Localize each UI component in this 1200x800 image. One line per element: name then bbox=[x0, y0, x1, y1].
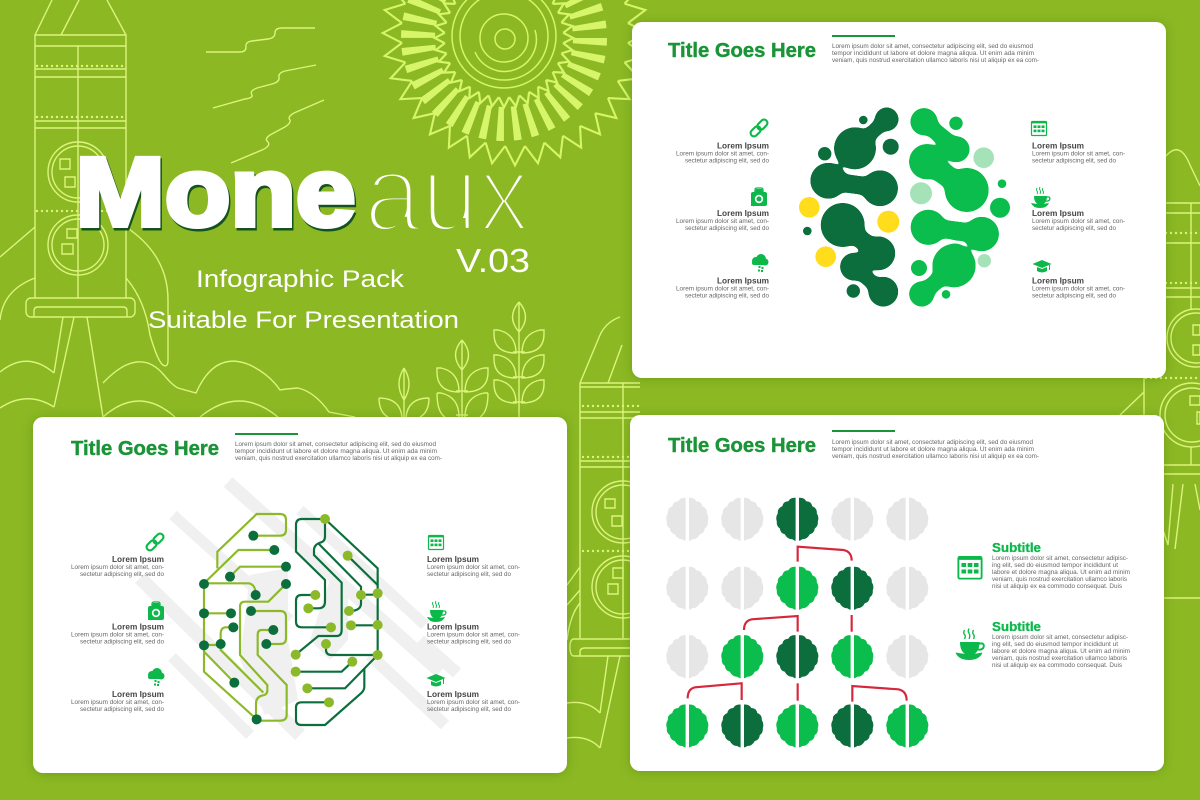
label left 1: sectetur adipiscing elit, sed do bbox=[685, 158, 770, 164]
label left 2: sectetur adipiscing elit, sed do bbox=[80, 638, 165, 646]
label left 1: Lorem ipsum dolor sit amet, con- bbox=[676, 150, 769, 158]
sun illustration bbox=[330, 0, 657, 222]
chart: circuit brain bbox=[199, 514, 383, 725]
label left 2 bbox=[676, 208, 770, 232]
subtitle lines bbox=[148, 266, 459, 334]
diagonal background bands bbox=[140, 482, 457, 735]
label right 2: sectetur adipiscing elit, sed do bbox=[427, 638, 512, 646]
subtitle block 1: nisi ut aliquip ex ea commodo consequat. Duis bbox=[992, 583, 1122, 590]
panel: metaball brain bbox=[632, 22, 1166, 378]
heading rule and description: Lorem ipsum dolor sit amet, consectetur adipiscing elit, sed do eiusmod bbox=[235, 441, 436, 448]
rocket illustration right bbox=[1120, 150, 1200, 598]
label left 2: Lorem Ipsum bbox=[717, 208, 769, 218]
label right 1: sectetur adipiscing elit, sed do bbox=[427, 571, 512, 578]
plants illustration bbox=[379, 302, 544, 417]
label right 1: Lorem ipsum dolor sit amet, con- bbox=[1032, 150, 1125, 158]
heading rule and description bbox=[235, 434, 442, 462]
label right 3 bbox=[1032, 276, 1125, 300]
label left 3: Lorem Ipsum bbox=[112, 689, 164, 699]
label right 2 bbox=[1032, 208, 1125, 232]
subtitle lines: Suitable For Presentation bbox=[148, 307, 459, 334]
label left 3: Lorem ipsum dolor sit amet, con- bbox=[71, 699, 164, 706]
label left 3: Lorem ipsum dolor sit amet, con- bbox=[676, 286, 769, 292]
label right 3 bbox=[427, 689, 520, 713]
icon: graduation cap bbox=[426, 674, 446, 686]
icon: calendar bbox=[1032, 121, 1046, 136]
label right 1: sectetur adipiscing elit, sed do bbox=[1032, 158, 1117, 164]
subtitle block 1: ing elit, sed do eiusmod tempor incididunt ut bbox=[992, 562, 1118, 569]
heading rule and description bbox=[832, 36, 1039, 64]
label right 2: Lorem Ipsum bbox=[427, 622, 479, 632]
heading rule and description: veniam, quis nostrud exercitation ullamco laboris nisi ut aliquip ex ea com- bbox=[832, 57, 1039, 64]
label left 1: Lorem Ipsum bbox=[112, 554, 164, 564]
heading rule and description: tempor incididunt ut labore et dolore magna aliqua. Ut enim ada minim bbox=[832, 50, 1034, 57]
subtitle block 2: ing elit, sed do eiusmod tempor incididunt ut bbox=[992, 641, 1118, 648]
rocket illustration left bbox=[0, 0, 355, 417]
chart: metaball brain bbox=[799, 107, 1010, 307]
icon: link bbox=[145, 532, 165, 552]
label left 2: Lorem ipsum dolor sit amet, con- bbox=[71, 632, 164, 638]
heading rule and description: veniam, quis nostrud exercitation ullamco laboris nisi ut aliquip ex ea com- bbox=[235, 455, 442, 462]
icon: camera bbox=[751, 188, 767, 206]
icon: coffee cup large bbox=[956, 628, 984, 660]
heading rule and description: Lorem ipsum dolor sit amet, consectetur adipiscing elit, sed do eiusmod bbox=[832, 43, 1033, 50]
label left 3: sectetur adipiscing elit, sed do bbox=[685, 292, 770, 300]
subtitle block 2: Subtitle bbox=[992, 619, 1041, 634]
subtitle block 2: labore et dolore magna aliqua. Ut enim ad minim bbox=[992, 648, 1130, 655]
label right 2: sectetur adipiscing elit, sed do bbox=[1032, 225, 1117, 232]
main title: Moneaux: aux bbox=[364, 132, 530, 255]
heading rule and description: tempor incididunt ut labore et dolore magna aliqua. Ut enim ada minim bbox=[832, 446, 1034, 453]
panel: circuit brain bbox=[33, 417, 567, 773]
version label: V.03 bbox=[456, 242, 530, 279]
label right 3: Lorem Ipsum bbox=[427, 689, 479, 699]
label right 1: Lorem Ipsum bbox=[427, 554, 479, 564]
heading: Title Goes Here bbox=[71, 438, 219, 460]
subtitle block 1 bbox=[992, 540, 1130, 590]
label left 3: sectetur adipiscing elit, sed do bbox=[80, 706, 165, 713]
label right 1: Lorem ipsum dolor sit amet, con- bbox=[427, 564, 520, 571]
label right 2: Lorem ipsum dolor sit amet, con- bbox=[1032, 218, 1125, 225]
icon: cloud bbox=[148, 668, 164, 686]
heading: Title Goes Here bbox=[668, 435, 816, 457]
subtitle block 2: Lorem ipsum dolor sit amet, consectetur adipisc- bbox=[992, 634, 1128, 641]
icon: coffee cup bbox=[1031, 187, 1050, 208]
icon: camera bbox=[148, 602, 164, 620]
label right 2: Lorem ipsum dolor sit amet, con- bbox=[427, 632, 520, 638]
panel: brain tree bbox=[630, 415, 1164, 771]
label left 1 bbox=[71, 554, 165, 578]
subtitle block 1: labore et dolore magna aliqua. Ut enim ad minim bbox=[992, 569, 1130, 576]
label right 3: sectetur adipiscing elit, sed do bbox=[1032, 292, 1117, 300]
label left 3 bbox=[676, 276, 770, 300]
heading rule and description: tempor incididunt ut labore et dolore magna aliqua. Ut enim ada minim bbox=[235, 448, 437, 455]
icon: calendar bbox=[428, 535, 444, 550]
rocket illustration centre bbox=[567, 317, 654, 748]
label left 2 bbox=[71, 622, 165, 646]
icon: cloud bbox=[752, 254, 768, 272]
heading rule and description bbox=[832, 431, 1039, 460]
label right 1: Lorem Ipsum bbox=[1032, 140, 1084, 150]
label left 1: sectetur adipiscing elit, sed do bbox=[80, 571, 165, 578]
subtitle block 1: Lorem ipsum dolor sit amet, consectetur adipisc- bbox=[992, 555, 1128, 562]
heading rule and description: Lorem ipsum dolor sit amet, consectetur adipiscing elit, sed do eiusmod bbox=[832, 439, 1033, 446]
label left 1: Lorem Ipsum bbox=[717, 140, 769, 150]
icon: graduation cap bbox=[1032, 260, 1052, 272]
label left 3 bbox=[71, 689, 165, 713]
icon: calendar large bbox=[958, 556, 982, 579]
label left 2: Lorem Ipsum bbox=[112, 622, 164, 632]
main title: Moneaux: Mone bbox=[76, 138, 356, 246]
main title: Moneaux: Mone bbox=[77, 140, 357, 249]
lightning squiggles bbox=[206, 28, 324, 163]
icon: coffee cup bbox=[427, 601, 446, 622]
subtitle lines: Infographic Pack bbox=[196, 266, 405, 293]
label left 3: Lorem Ipsum bbox=[717, 276, 769, 286]
label right 1 bbox=[1032, 140, 1125, 164]
subtitle block 1: Subtitle bbox=[992, 540, 1041, 555]
chart: brain grid bbox=[666, 498, 928, 748]
subtitle block 2: veniam, quis nostrud exercitation ullamco laboris bbox=[992, 655, 1127, 662]
label right 3: Lorem ipsum dolor sit amet, con- bbox=[427, 699, 520, 706]
label left 2: sectetur adipiscing elit, sed do bbox=[685, 225, 770, 232]
label left 2: Lorem ipsum dolor sit amet, con- bbox=[676, 218, 769, 225]
main title: Moneaux bbox=[76, 132, 530, 255]
label right 3: sectetur adipiscing elit, sed do bbox=[427, 706, 512, 713]
label right 3: Lorem Ipsum bbox=[1032, 276, 1084, 286]
label right 1 bbox=[427, 554, 520, 578]
heading rule and description: veniam, quis nostrud exercitation ullamco laboris nisi ut aliquip ex ea com- bbox=[832, 453, 1039, 460]
heading: Title Goes Here bbox=[668, 40, 816, 62]
label right 3: Lorem ipsum dolor sit amet, con- bbox=[1032, 286, 1125, 292]
label left 1 bbox=[676, 140, 770, 164]
label right 2: Lorem Ipsum bbox=[1032, 208, 1084, 218]
subtitle block 2: nisi ut aliquip ex ea commodo consequat. Duis bbox=[992, 662, 1122, 669]
icon: link bbox=[749, 118, 769, 138]
label right 2 bbox=[427, 622, 520, 646]
subtitle block 1: veniam, quis nostrud exercitation ullamco laboris bbox=[992, 576, 1127, 583]
label left 1: Lorem ipsum dolor sit amet, con- bbox=[71, 564, 164, 571]
subtitle block 2 bbox=[992, 619, 1130, 669]
